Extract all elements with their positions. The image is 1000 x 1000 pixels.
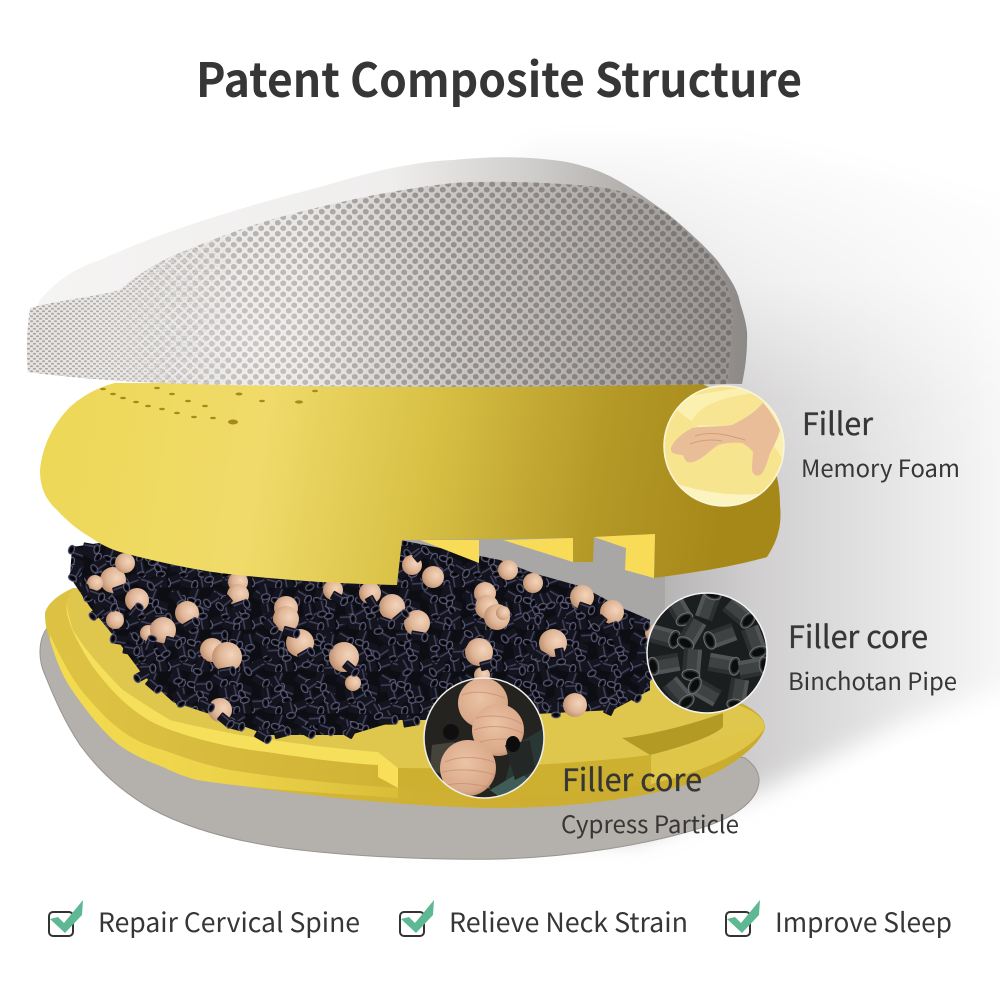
band under floor bbox=[398, 755, 651, 795]
recess right bbox=[622, 713, 723, 755]
foam air holes bbox=[100, 387, 318, 424]
bright strip bbox=[66, 602, 378, 765]
title: Patent Composite Structure bbox=[196, 42, 802, 111]
label: binchotan pipe bbox=[788, 612, 957, 697]
photo inset: binchotan pipes bbox=[645, 586, 772, 715]
label: memory foam bbox=[801, 399, 960, 484]
tray floor bbox=[66, 588, 764, 768]
benefit: improve sleep: Improve Sleep bbox=[775, 901, 952, 940]
background shadow bbox=[380, 90, 1000, 835]
notch grey backdrop bbox=[400, 530, 665, 640]
pile of binchotan pipes and cypress balls bbox=[67, 540, 661, 745]
hand bbox=[671, 403, 780, 476]
photo inset: memory foam bbox=[663, 385, 785, 507]
loose pipes bbox=[67, 542, 655, 745]
label: memory foam: Memory Foam bbox=[801, 449, 960, 484]
outer bright strip bbox=[50, 635, 398, 798]
grey base layer bbox=[40, 628, 759, 859]
label: binchotan pipe: Filler core bbox=[788, 612, 928, 657]
tray corner step bbox=[378, 752, 398, 788]
label: cypress particle: Cypress Particle bbox=[561, 805, 739, 840]
benefit: relieve neck strain: Relieve Neck Strain bbox=[449, 901, 688, 940]
white cover bbox=[28, 157, 747, 384]
lower yellow tray bbox=[45, 588, 765, 808]
label: cypress particle bbox=[561, 755, 739, 840]
memory foam layer bbox=[40, 383, 780, 585]
photo inset: cypress particle bbox=[423, 677, 545, 799]
top pillow cover with mesh bbox=[20, 157, 760, 395]
benefit: repair cervical spine: Repair Cervical Spine bbox=[98, 901, 360, 940]
label: cypress particle: Filler core bbox=[562, 755, 702, 800]
cut faces bbox=[420, 540, 479, 563]
cypress balls bbox=[87, 553, 661, 722]
mesh panel bbox=[27, 182, 732, 387]
foam body bbox=[40, 383, 780, 585]
front lighter right bbox=[651, 728, 764, 784]
tray body bbox=[45, 588, 765, 808]
label: binchotan pipe: Binchotan Pipe bbox=[788, 662, 957, 697]
label: memory foam: Filler bbox=[802, 399, 874, 444]
